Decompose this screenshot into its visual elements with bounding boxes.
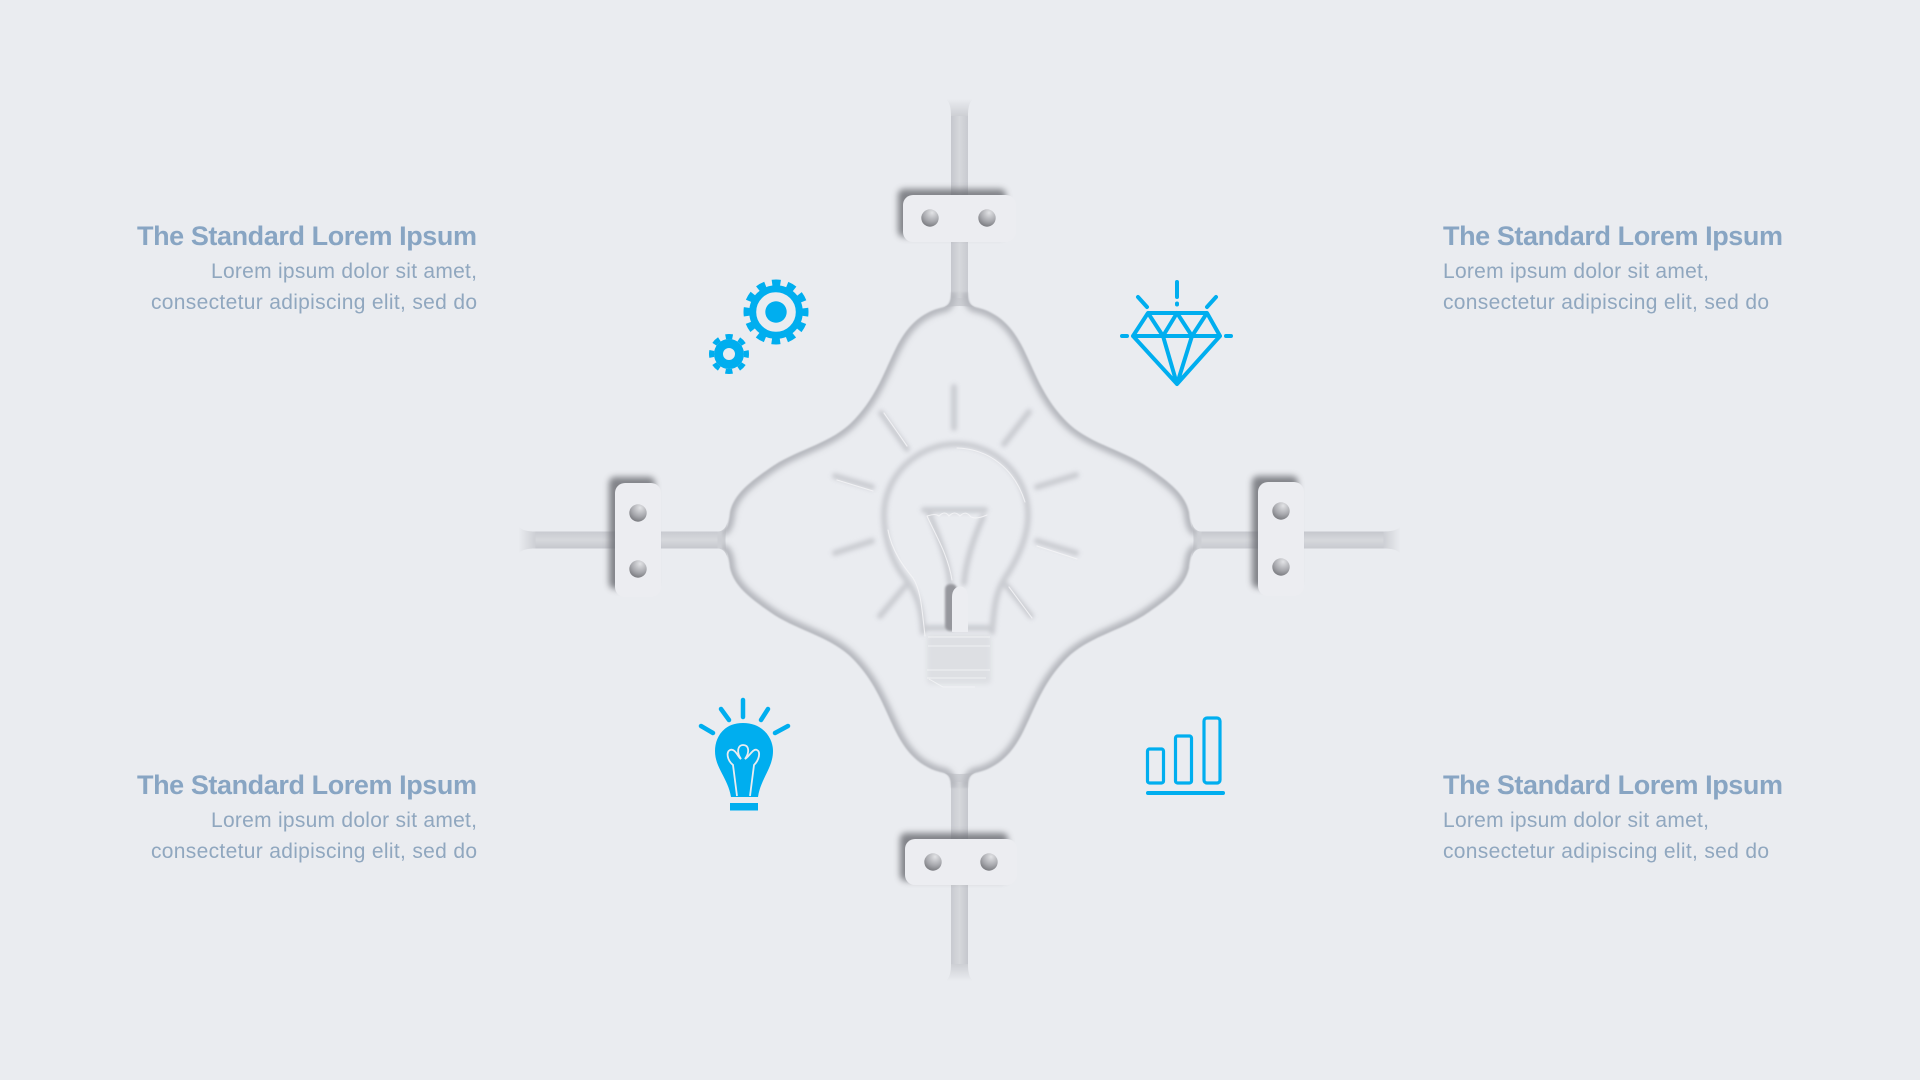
clamp: left (609, 477, 661, 597)
text block: bottom left: Lorem ipsum dolor sit amet, (211, 809, 477, 832)
text block: bottom right (1443, 770, 1783, 863)
text block: top right (1443, 221, 1783, 314)
text block: bottom left (137, 770, 477, 863)
text block: top left: Lorem ipsum dolor sit amet, (211, 260, 477, 283)
clamp: bottom (900, 833, 1017, 885)
text block: top right: The Standard Lorem Ipsum (1443, 221, 1783, 251)
text block: top right: Lorem ipsum dolor sit amet, (1443, 260, 1709, 283)
clamp: right (1252, 476, 1304, 596)
text block: bottom right: The Standard Lorem Ipsum (1443, 770, 1783, 800)
clamp: top (898, 189, 1016, 242)
bulb screw base (927, 634, 991, 687)
text block: top left (137, 221, 477, 314)
text block: bottom left: consectetur adipiscing elit, sed do (151, 840, 477, 863)
icon: diamond (1122, 282, 1231, 384)
text block: bottom right: consectetur adipiscing elit, sed do (1443, 840, 1769, 863)
text block: top left: consectetur adipiscing elit, sed do (151, 291, 477, 314)
text block: top right: consectetur adipiscing elit, sed do (1443, 291, 1769, 314)
bulb grooves (835, 387, 1076, 632)
text block: top left: The Standard Lorem Ipsum (137, 221, 477, 251)
icon: gears (712, 282, 806, 372)
bulb stem (945, 584, 968, 632)
text block: bottom left: The Standard Lorem Ipsum (137, 770, 477, 800)
icon: embossed central light bulb (835, 387, 1077, 687)
panel: channels (518, 99, 1400, 981)
icon: bar chart (1148, 718, 1223, 793)
panel: central blob groove (722, 292, 1197, 788)
icon: light bulb (701, 700, 788, 810)
text block: bottom right: Lorem ipsum dolor sit amet, (1443, 809, 1709, 832)
bulb highlights (837, 413, 1077, 636)
